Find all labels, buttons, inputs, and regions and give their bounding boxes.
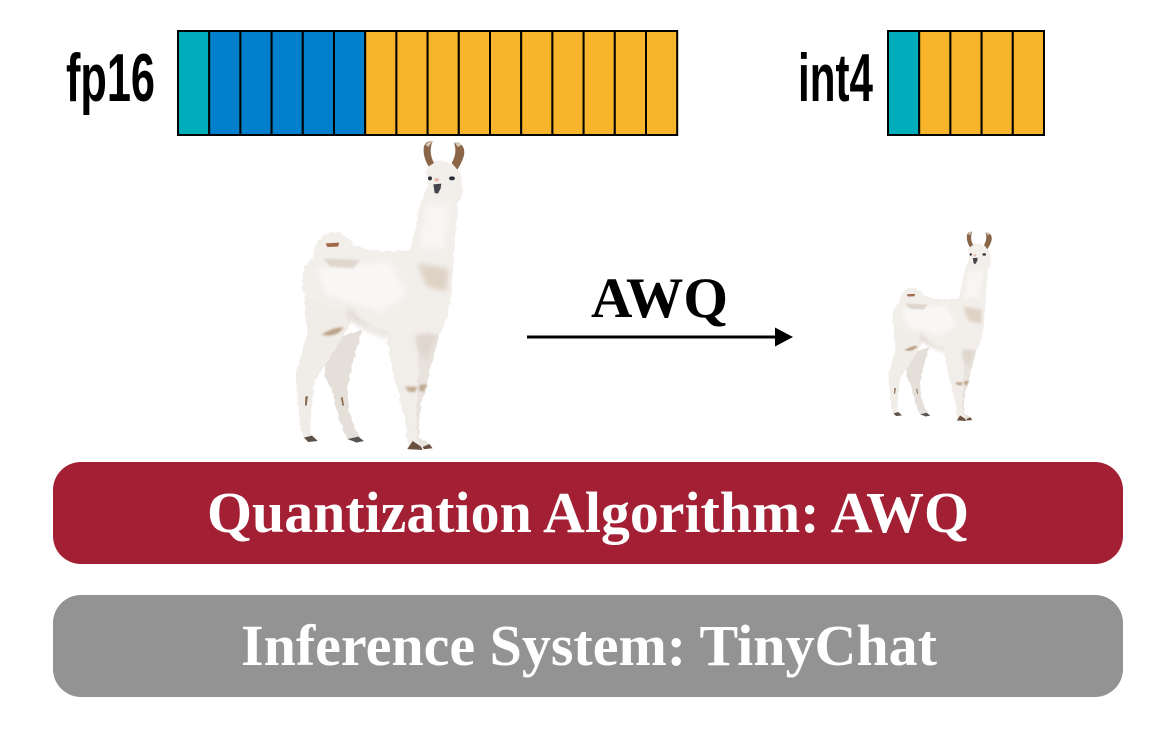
label: fp16: fp16 (66, 40, 155, 116)
image: large llama (296, 141, 464, 450)
panel: quantization algorithm (53, 462, 1123, 564)
bit bar: int4 (888, 31, 1044, 135)
panel: inference system: Inference System: TinyChat (241, 613, 938, 678)
panel: quantization algorithm: Quantization Algorithm: AWQ (207, 480, 969, 545)
image: small llama (889, 232, 992, 421)
panel: inference system (53, 595, 1123, 697)
bit bar: fp16 (178, 31, 677, 135)
arrow: fp16 to int4 (527, 328, 793, 346)
label: AWQ: AWQ (591, 267, 728, 330)
label: int4: int4 (798, 40, 873, 116)
